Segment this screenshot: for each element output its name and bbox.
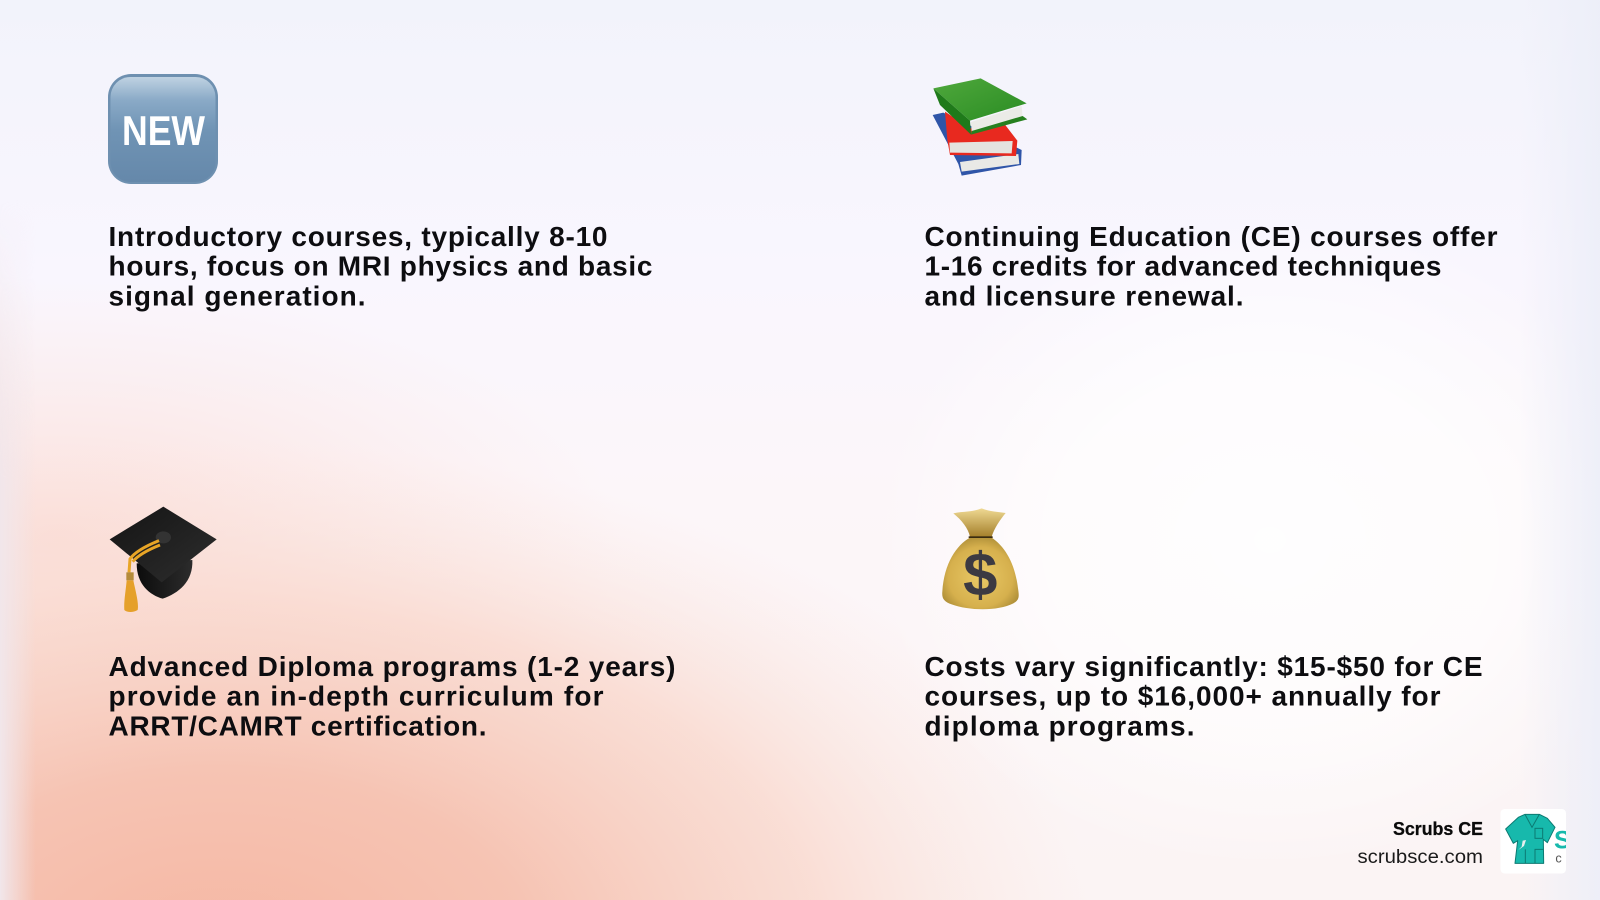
panel: continuing education courses (924, 78, 1506, 311)
text: program costs description: Costs vary significantly: $15-$50 for CE (924, 651, 1482, 682)
text: continuing education description: 1-16 credits for advanced techniques (924, 250, 1442, 282)
text: program costs description: diploma programs. (924, 710, 1194, 742)
text: advanced diploma description: Advanced Diploma programs (1-2 years) (108, 651, 676, 682)
text: advanced diploma description: ARRT/CAMRT certification. (108, 710, 486, 742)
icon: new badge: NEW (122, 107, 205, 154)
branding footer (1358, 809, 1571, 874)
text: continuing education description: Continuing Education (CE) courses offer (924, 221, 1498, 252)
icon: new badge (108, 74, 218, 184)
text: brand name: Scrubs CE (1393, 818, 1483, 839)
text: website: scrubsce.com (1358, 847, 1483, 868)
icon: graduation cap (110, 507, 217, 612)
icon: money bag (942, 508, 1019, 610)
text: program costs description: courses, up to $16,000+ annually for (924, 680, 1441, 712)
text: introductory courses description: signal generation. (108, 280, 366, 312)
text: continuing education description: and licensure renewal. (924, 280, 1244, 312)
panel: program costs (924, 508, 1491, 742)
icon: scrubs logo (1500, 809, 1571, 874)
icon: money bag: $ (963, 541, 997, 610)
text: advanced diploma description: provide an in-depth curriculum for (108, 680, 604, 712)
text: introductory courses description: hours, focus on MRI physics and basic (108, 250, 652, 282)
icon: scrubs logo: S (1554, 827, 1571, 855)
icon: scrubs logo: c (1555, 852, 1562, 866)
panel: introductory courses (108, 74, 661, 312)
panel: advanced diploma programs (108, 507, 684, 742)
icon: stack of books (933, 78, 1027, 176)
text: introductory courses description: Introductory courses, typically 8-10 (108, 221, 608, 252)
